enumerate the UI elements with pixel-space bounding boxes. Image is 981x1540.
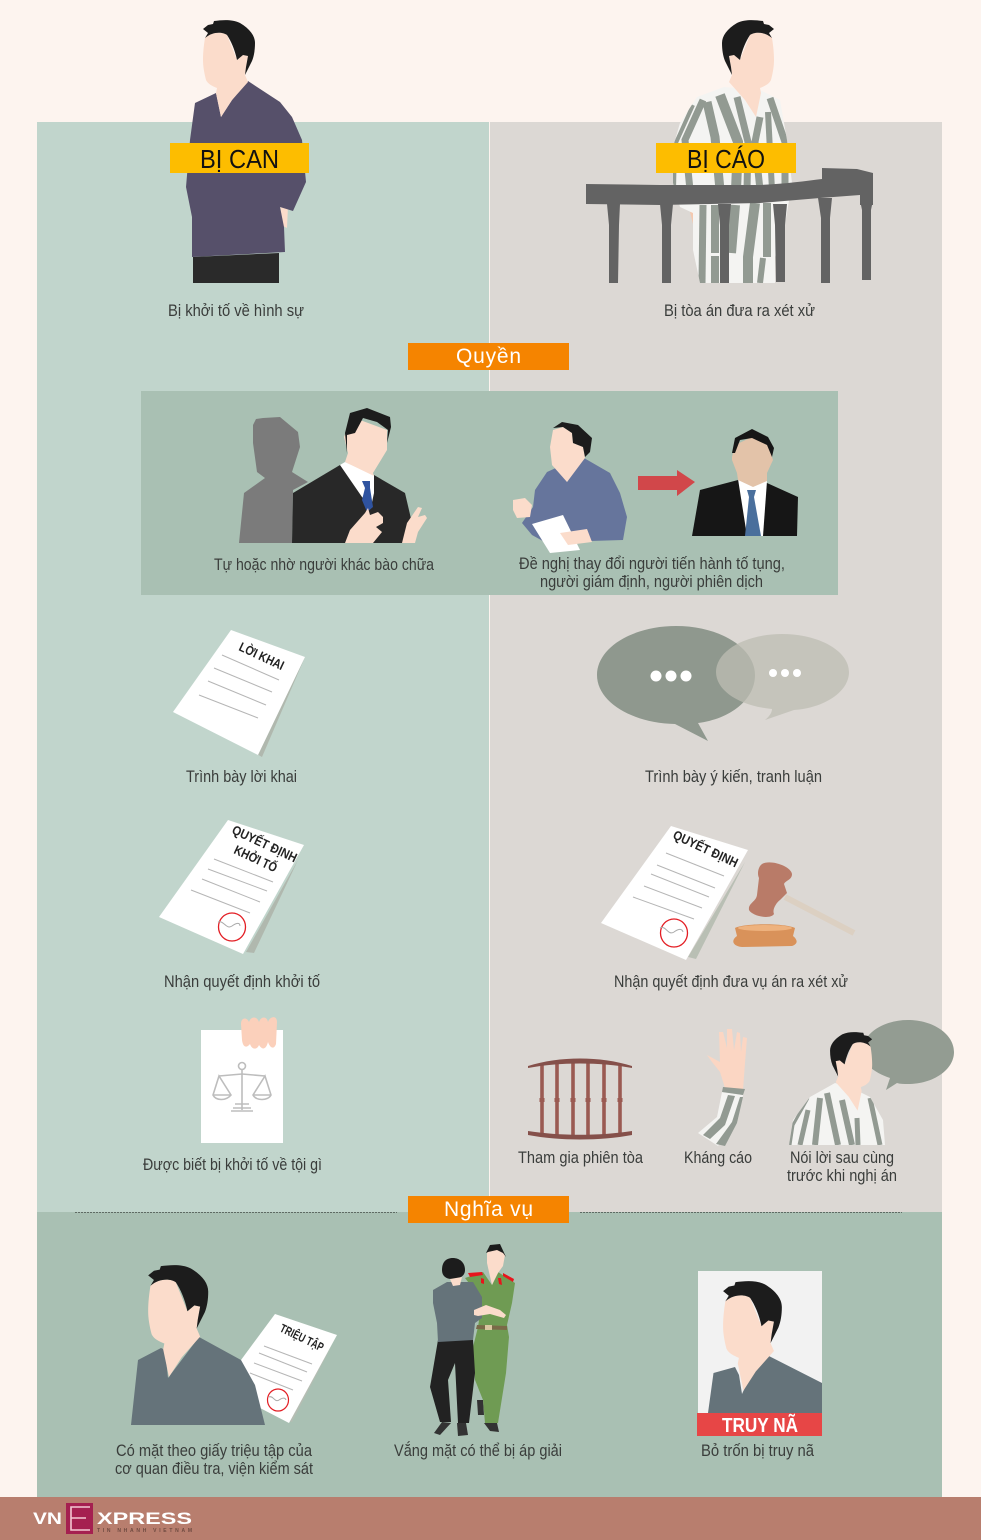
- document: quyết định with gavel: QUYẾT ĐỊNH: [671, 827, 741, 870]
- panel: obligations: [37, 1212, 942, 1497]
- icon: prisoner speaking: [789, 1032, 885, 1145]
- caption: được biết tội gì: Được biết bị khởi tố về tội gì: [143, 1156, 322, 1174]
- panel: bị can column: [37, 122, 489, 1212]
- icon: small railing: [528, 1058, 632, 1140]
- figure: police escorting a man: [430, 1244, 515, 1436]
- caption: nhận quyết định khởi tố: Nhận quyết định khởi tố: [164, 973, 320, 991]
- caption: đề nghị thay đổi: [519, 555, 785, 591]
- arrow: [638, 470, 695, 496]
- icon: lawyer with shadow person: [239, 408, 427, 543]
- figure: bị cáo prisoner at railing: [586, 20, 873, 283]
- poster: truy nã: TRUY NÃ: [722, 1414, 798, 1437]
- document: lời khai: [173, 630, 305, 757]
- caption: nói lời sau cùng: Nói lời sau cùng: [790, 1149, 894, 1167]
- icon: summons document: [235, 1314, 337, 1423]
- figure: bị can man: [186, 20, 306, 283]
- caption: lời khai: Trình bày lời khai: [186, 768, 297, 786]
- label: bị can: BỊ CAN: [200, 144, 279, 174]
- document: quyết định khởi tố: QUYẾT ĐỊNH: [230, 822, 300, 865]
- caption: kháng cáo: Kháng cáo: [684, 1149, 752, 1167]
- caption: đề nghị thay đổi: người giám định, người phiên dịch: [540, 573, 763, 591]
- document: quyết định khởi tố: KHỞI TỐ: [232, 842, 280, 875]
- footer bar: [0, 1497, 981, 1540]
- document: quyết định with gavel: [601, 826, 854, 960]
- logo: vnexpress: [33, 1503, 192, 1534]
- caption: bị tòa án đưa ra xét xử: Bị tòa án đưa ra xét xử: [664, 302, 815, 320]
- caption: đề nghị thay đổi: Đề nghị thay đổi người tiến hành tố tụng,: [519, 555, 785, 573]
- caption: vắng mặt: Vắng mặt có thể bị áp giải: [394, 1441, 562, 1460]
- panel: shared rights band: [141, 391, 838, 595]
- panel: bị cáo column: [490, 122, 942, 1212]
- logo: vnexpress: TIN NHANH VIETNAM: [97, 1528, 192, 1534]
- logo: vnexpress: XPRESS: [97, 1509, 192, 1528]
- caption: nhận quyết định đưa vụ án: Nhận quyết định đưa vụ án ra xét xử: [614, 973, 848, 991]
- caption: có mặt theo giấy triệu tập: cơ quan điều tra, viện kiểm sát: [115, 1460, 313, 1478]
- icon: raised hand: [698, 1029, 747, 1146]
- caption: nói lời sau cùng: trước khi nghị án: [787, 1167, 897, 1185]
- label: bị cáo: BỊ CÁO: [687, 144, 765, 174]
- label: bị can: [170, 143, 309, 174]
- heading: quyền: Quyền: [456, 345, 521, 368]
- icon: man with paper: [513, 422, 627, 553]
- document: quyết định khởi tố: [159, 820, 304, 954]
- icon: speech bubbles: [597, 626, 849, 741]
- poster: truy nã: [697, 1271, 822, 1437]
- caption: tranh luận: Trình bày ý kiến, tranh luận: [645, 768, 822, 786]
- figure: summoned man: [131, 1265, 265, 1425]
- document: lời khai: LỜI KHAI: [237, 639, 287, 673]
- icon: speech bubble of prisoner: [862, 1020, 954, 1090]
- caption: bào chữa: Tự hoặc nhờ người khác bào chữa: [214, 556, 435, 574]
- icon: replaced official: [692, 429, 798, 536]
- label: bị cáo: [656, 143, 796, 174]
- heading: nghĩa vụ: [408, 1196, 569, 1223]
- caption: bỏ trốn: Bỏ trốn bị truy nã: [701, 1442, 815, 1460]
- caption: tham gia phiên tòa: Tham gia phiên tòa: [518, 1149, 644, 1167]
- heading: nghĩa vụ: Nghĩa vụ: [444, 1198, 533, 1221]
- caption: bị khởi tố: Bị khởi tố về hình sự: [168, 302, 304, 320]
- logo: vnexpress: VN: [33, 1509, 62, 1528]
- caption: có mặt theo giấy triệu tập: Có mặt theo giấy triệu tập của: [116, 1442, 313, 1460]
- heading: quyền: [408, 343, 569, 370]
- icon: summons document: TRIỆU TẬP: [278, 1320, 327, 1354]
- icon: paper with scales and hand: [201, 1017, 283, 1143]
- caption: có mặt theo giấy triệu tập: [115, 1442, 313, 1478]
- caption: nói lời sau cùng: [787, 1149, 897, 1185]
